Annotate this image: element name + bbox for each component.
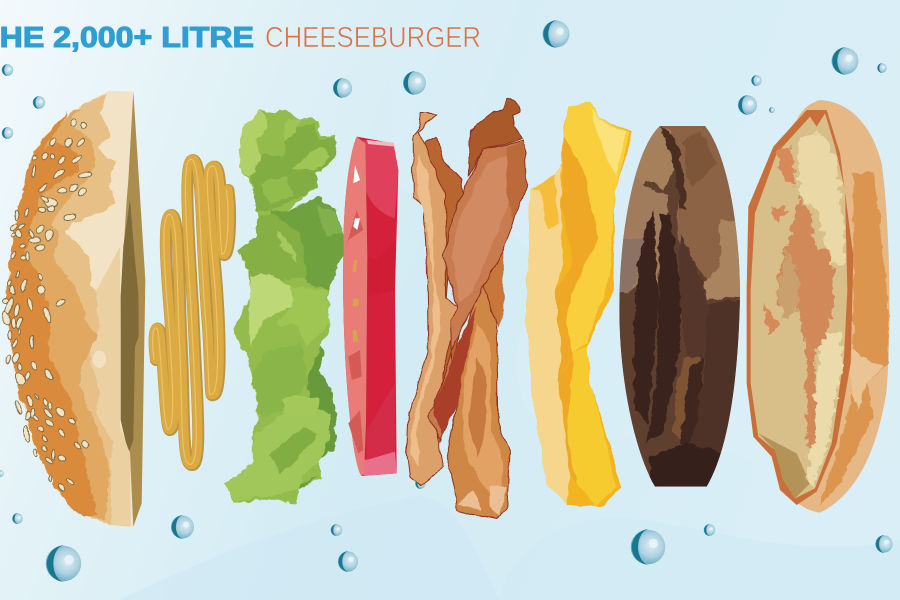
title — [0, 22, 481, 54]
top dark end — [468, 99, 523, 177]
bubble — [751, 75, 762, 86]
left strip — [407, 113, 458, 485]
bubble — [875, 535, 893, 553]
beef patty — [617, 120, 743, 490]
mustard — [153, 159, 230, 465]
sesame seeds — [2, 117, 92, 492]
bubble — [769, 107, 775, 113]
bubble — [46, 545, 81, 582]
bubble — [331, 524, 342, 536]
front strip — [428, 140, 527, 440]
bubble — [12, 513, 23, 524]
bubble — [415, 478, 426, 489]
bacon strips — [407, 99, 527, 520]
cheese slice — [527, 101, 632, 507]
bubble — [0, 470, 4, 477]
bubble — [543, 20, 569, 48]
bubble — [832, 47, 858, 75]
tomato slice — [343, 137, 398, 476]
bubble — [33, 96, 45, 109]
bubble — [704, 524, 715, 536]
bubble — [333, 78, 352, 98]
bottom bun — [747, 100, 889, 513]
bubble — [171, 515, 194, 539]
bubble — [631, 529, 665, 565]
bubble — [738, 95, 757, 115]
bubble — [338, 551, 358, 572]
top sesame bun — [2, 91, 145, 527]
bubble — [877, 63, 887, 73]
title: CHEESEBURGER — [265, 22, 481, 54]
lower right strip — [447, 287, 510, 520]
lettuce — [225, 108, 348, 503]
bubble — [2, 127, 13, 139]
bubble — [2, 64, 13, 76]
bubble — [403, 71, 426, 95]
back strip — [423, 137, 463, 443]
